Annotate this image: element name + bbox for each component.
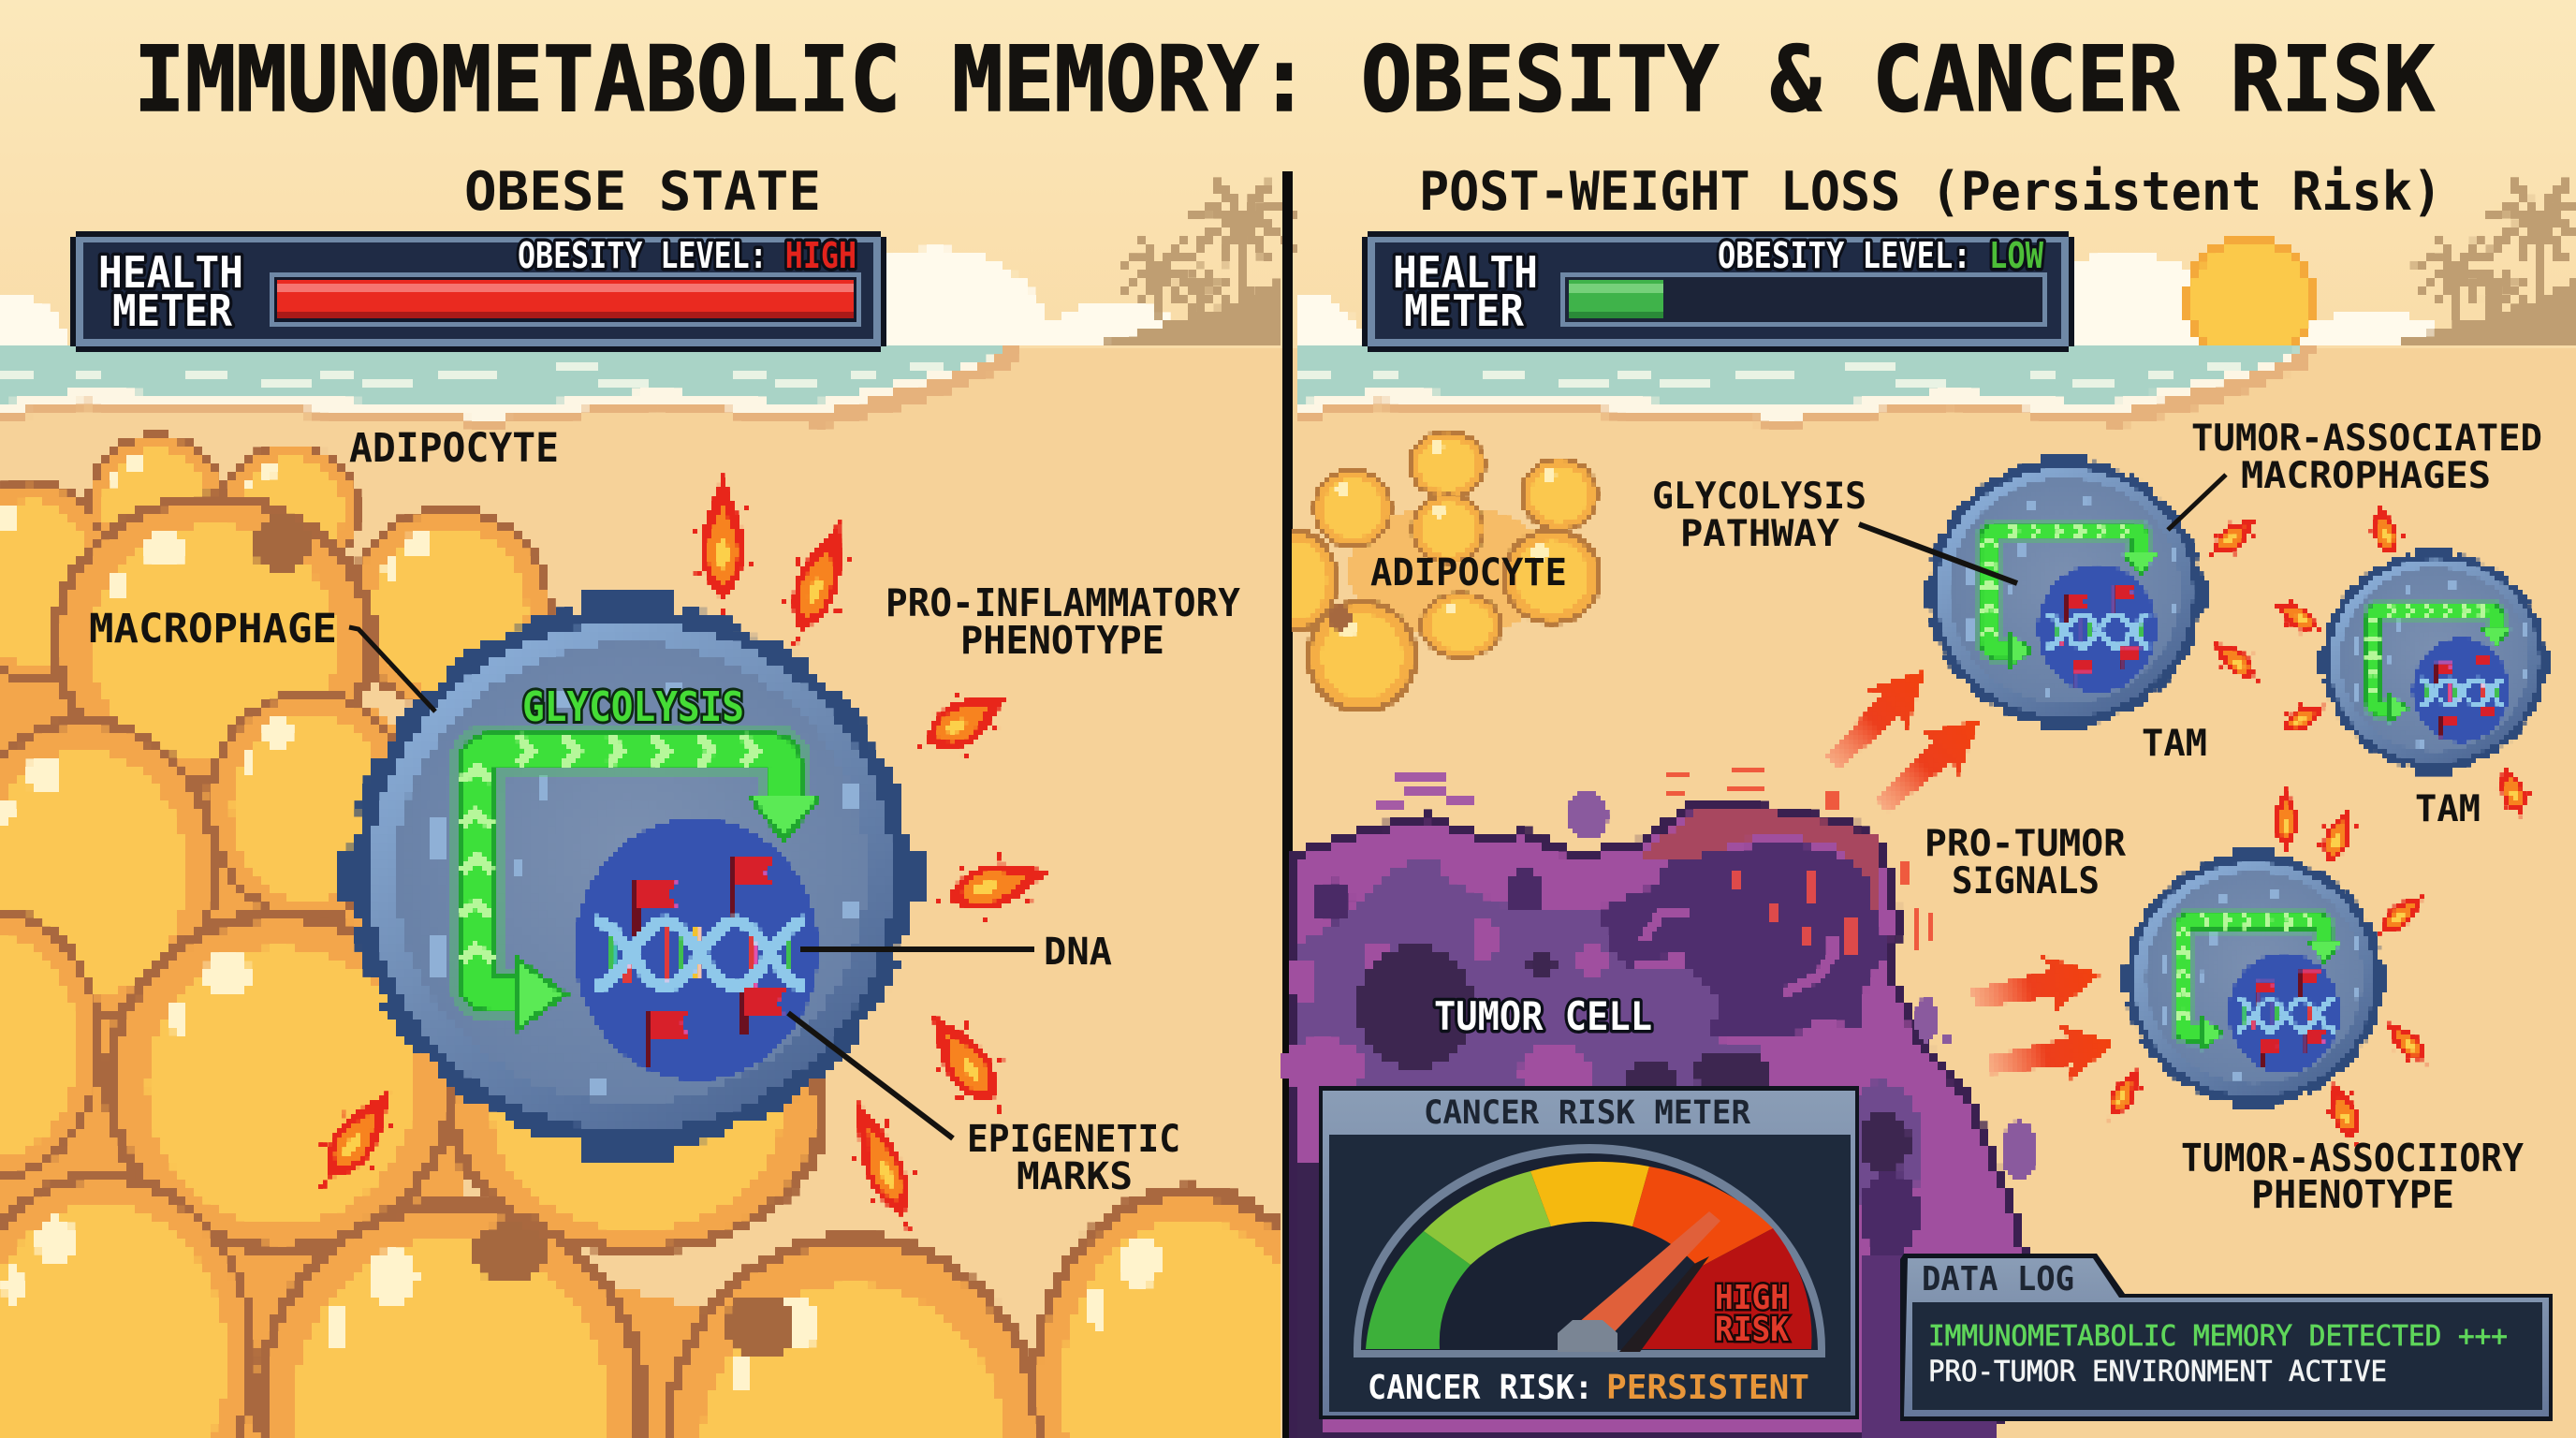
label: TAM (first): TAM <box>2142 723 2207 765</box>
label: pro-tumor signals: PRO-TUMOR <box>1925 823 2127 865</box>
label: TAM (second): TAM <box>2415 788 2481 830</box>
macrophage cell body <box>339 592 923 1161</box>
label: phenotype <box>2181 1136 2524 1217</box>
heading: obese state: OBESE STATE <box>464 161 821 223</box>
high risk tag: HIGH <box>1715 1279 1789 1317</box>
panel: cancer risk meter <box>1319 1086 1859 1419</box>
meter label: HEALTH <box>98 247 243 298</box>
adipocyte cluster <box>0 433 1348 1438</box>
label: macrophage with leader line: MACROPHAGE <box>89 606 337 653</box>
label: glycolysis pathway with leader line: PATHWAY <box>1680 513 1840 555</box>
label: pro-inflammatory phenotype: PRO-INFLAMMATORY <box>886 580 1240 625</box>
health meter: post-weight loss: METER <box>1404 286 1524 336</box>
label: epigenetic marks with leader line: MARKS <box>1017 1155 1133 1198</box>
label: epigenetic marks with leader line: EPIGENETIC <box>967 1118 1180 1161</box>
beach scene <box>1296 185 2576 427</box>
clouds <box>1297 253 2435 345</box>
label: tumor-associated macrophages with leader line: MACROPHAGES <box>2241 455 2491 497</box>
inflammatory sparks <box>299 474 1060 1240</box>
label: tumor-associated macrophages with leader line: TUMOR-ASSOCIATED <box>2191 418 2542 460</box>
log line green: IMMUNOMETABOLIC MEMORY DETECTED +++ <box>1928 1320 2508 1353</box>
label: pro-tumor signals <box>1925 823 2127 902</box>
label: adipocyte: ADIPOCYTE <box>349 425 559 472</box>
macrophage B <box>2318 547 2552 775</box>
green bar <box>1560 272 2047 327</box>
panel: obese state <box>0 161 1348 1438</box>
health meter: obese: METER <box>112 286 232 336</box>
high risk tag <box>1715 1279 1789 1349</box>
panel: post-weight loss <box>1229 161 2576 1438</box>
cancer risk readout <box>1368 1369 1809 1407</box>
red bar <box>270 272 861 327</box>
label: epigenetic marks with leader line <box>788 1013 1180 1198</box>
cancer risk readout: CANCER RISK: <box>1368 1369 1593 1407</box>
label: glycolysis: GLYCOLYSIS <box>522 683 744 731</box>
meter label: HEALTH <box>1393 247 1538 298</box>
cancer risk readout: PERSISTENT <box>1606 1369 1809 1407</box>
tab label: DATA LOG <box>1922 1260 2074 1299</box>
high risk tag: RISK <box>1715 1311 1789 1349</box>
glycolysis arrow, nucleus, DNA and epigenetic flags <box>461 736 824 1080</box>
panel: data log <box>1900 1254 2553 1421</box>
label: glycolysis pathway with leader line <box>1652 476 2017 583</box>
label: tumor-associated macrophages with leader line <box>2168 418 2542 530</box>
illustration: beach and adipocytes <box>0 185 1348 1438</box>
label: glycolysis pathway with leader line: GLYCOLYSIS <box>1652 476 1866 518</box>
label: DNA with leader line: DNA <box>1044 931 1112 974</box>
sparks around macrophages <box>2095 499 2539 1151</box>
obesity level readout: OBESITY LEVEL: HIGH <box>518 235 856 276</box>
divider <box>1282 171 1293 1438</box>
title: IMMUNOMETABOLIC MEMORY: OBESITY & CANCER RISK <box>134 27 2435 132</box>
heading: post-weight loss: POST-WEIGHT LOSS (Persistent Risk) <box>1419 161 2442 223</box>
meter title: CANCER RISK METER <box>1424 1094 1751 1132</box>
sun <box>2184 235 2317 348</box>
gauge <box>1354 1144 1825 1357</box>
obesity level readout: OBESITY LEVEL: LOW <box>1718 235 2043 276</box>
macrophage C <box>2119 848 2389 1110</box>
label: adipocyte: ADIPOCYTE <box>1370 551 1567 594</box>
pro-tumor signal arrows <box>1811 650 2120 1094</box>
label: phenotype: TUMOR-ASSOCIIORY <box>2181 1136 2524 1181</box>
illustration: beach and tumor <box>1229 185 2576 1438</box>
macrophage A <box>1922 453 2208 732</box>
clouds <box>0 244 1171 345</box>
label: tumor cell: TUMOR CELL <box>1434 993 1652 1039</box>
label: macrophage with leader line <box>89 606 435 712</box>
tumor details and debris <box>1376 768 2037 1181</box>
label: phenotype: PHENOTYPE <box>2251 1172 2454 1217</box>
label: pro-tumor signals: SIGNALS <box>1952 860 2100 902</box>
beach scene <box>0 185 1293 427</box>
health meter: obese <box>70 231 886 352</box>
tumor cell <box>1281 801 2023 1438</box>
small adipocyte cluster <box>1254 430 1603 713</box>
label: pro-inflammatory phenotype <box>886 580 1240 663</box>
label: pro-inflammatory phenotype: PHENOTYPE <box>960 618 1164 663</box>
log line white: PRO-TUMOR ENVIRONMENT ACTIVE <box>1928 1356 2387 1388</box>
health meter: post-weight loss <box>1362 231 2074 352</box>
